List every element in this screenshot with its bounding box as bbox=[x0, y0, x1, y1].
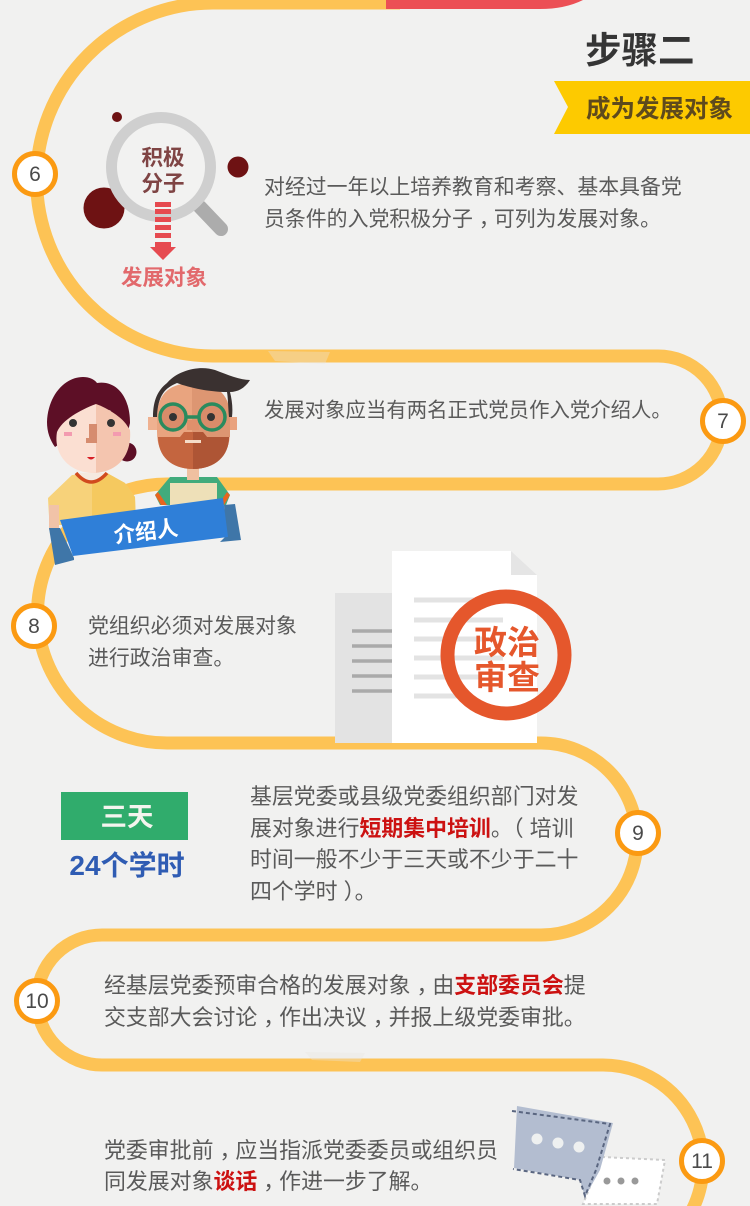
text: step 10: 交支部大会讨论 ，作出决议 ，并报上级党委审批。 bbox=[104, 1005, 586, 1030]
marker 10 bbox=[16, 980, 58, 1022]
text: step 9: 四个学时 ）。 bbox=[250, 879, 376, 904]
illustration: two introducers bbox=[47, 368, 250, 565]
faint watermark bbox=[268, 351, 365, 1062]
icon: magnifier with active members bbox=[84, 112, 248, 290]
callout: three days 24 hours: 三天 bbox=[100, 802, 154, 832]
text: step 8: 进行政治审查。 bbox=[88, 647, 234, 670]
icon: documents with political review stamp bbox=[335, 551, 564, 743]
icon: magnifier with active members: 积极 bbox=[141, 146, 185, 170]
text: step 8 bbox=[88, 615, 297, 670]
icon: magnifier with active members: 分子 bbox=[141, 172, 185, 196]
marker 10: 10 bbox=[25, 990, 49, 1013]
marker 6: 6 bbox=[29, 163, 41, 186]
icon: documents with political review stamp: 政治 bbox=[474, 624, 540, 661]
text: step 11: 同发展对象谈话 ，作进一步了解。 bbox=[104, 1169, 432, 1194]
text: step 6 bbox=[264, 176, 682, 231]
marker 8: 8 bbox=[28, 615, 40, 638]
marker 9: 9 bbox=[632, 822, 644, 845]
text: step 10: 经基层党委预审合格的发展对象 ，由支部委员会提 bbox=[104, 973, 586, 998]
marker 9 bbox=[618, 812, 658, 854]
marker 7 bbox=[702, 400, 744, 442]
icon: magnifier with active members: 发展对象 bbox=[121, 266, 207, 290]
callout: three days 24 hours bbox=[61, 792, 188, 881]
text: step 9: 时间一般不少于三天或不少于二十 bbox=[250, 847, 578, 872]
callout: three days 24 hours: 24个学时 bbox=[69, 850, 185, 881]
icon: speech bubbles bbox=[512, 1106, 665, 1204]
text: step 6: 员条件的入党积极分子 ，可列为发展对象。 bbox=[264, 208, 661, 231]
ribbon: introducers: 介绍人 bbox=[113, 516, 180, 548]
marker 11: 11 bbox=[691, 1150, 713, 1173]
text: step 10 bbox=[104, 973, 586, 1030]
text: step 8: 党组织必须对发展对象 bbox=[88, 615, 297, 638]
marker 6 bbox=[14, 154, 56, 194]
ribbon: introducers bbox=[49, 498, 241, 565]
red path segment bbox=[386, 0, 590, 9]
text: step 11: 党委审批前 ，应当指派党委委员或组织员 bbox=[104, 1138, 498, 1163]
text: step 7: 发展对象应当有两名正式党员作入党介绍人。 bbox=[264, 399, 672, 422]
text: step 6: 对经过一年以上培养教育和考察、基本具备党 bbox=[264, 176, 682, 199]
text: step 9 bbox=[250, 784, 578, 904]
banner: become development target bbox=[554, 81, 750, 134]
heading: step two: 步骤二 bbox=[585, 30, 694, 71]
man bbox=[148, 368, 250, 508]
marker 11 bbox=[682, 1140, 722, 1182]
icon: documents with political review stamp: 审查 bbox=[474, 659, 540, 696]
marker 7: 7 bbox=[717, 410, 729, 433]
text: step 9: 展对象进行短期集中培训。（ 培训 bbox=[250, 816, 574, 841]
woman bbox=[47, 377, 136, 535]
marker 8 bbox=[14, 606, 54, 646]
text: step 11 bbox=[104, 1138, 498, 1194]
banner: become development target: 成为发展对象 bbox=[586, 95, 733, 123]
text: step 9: 基层党委或县级党委组织部门对发 bbox=[250, 784, 578, 809]
